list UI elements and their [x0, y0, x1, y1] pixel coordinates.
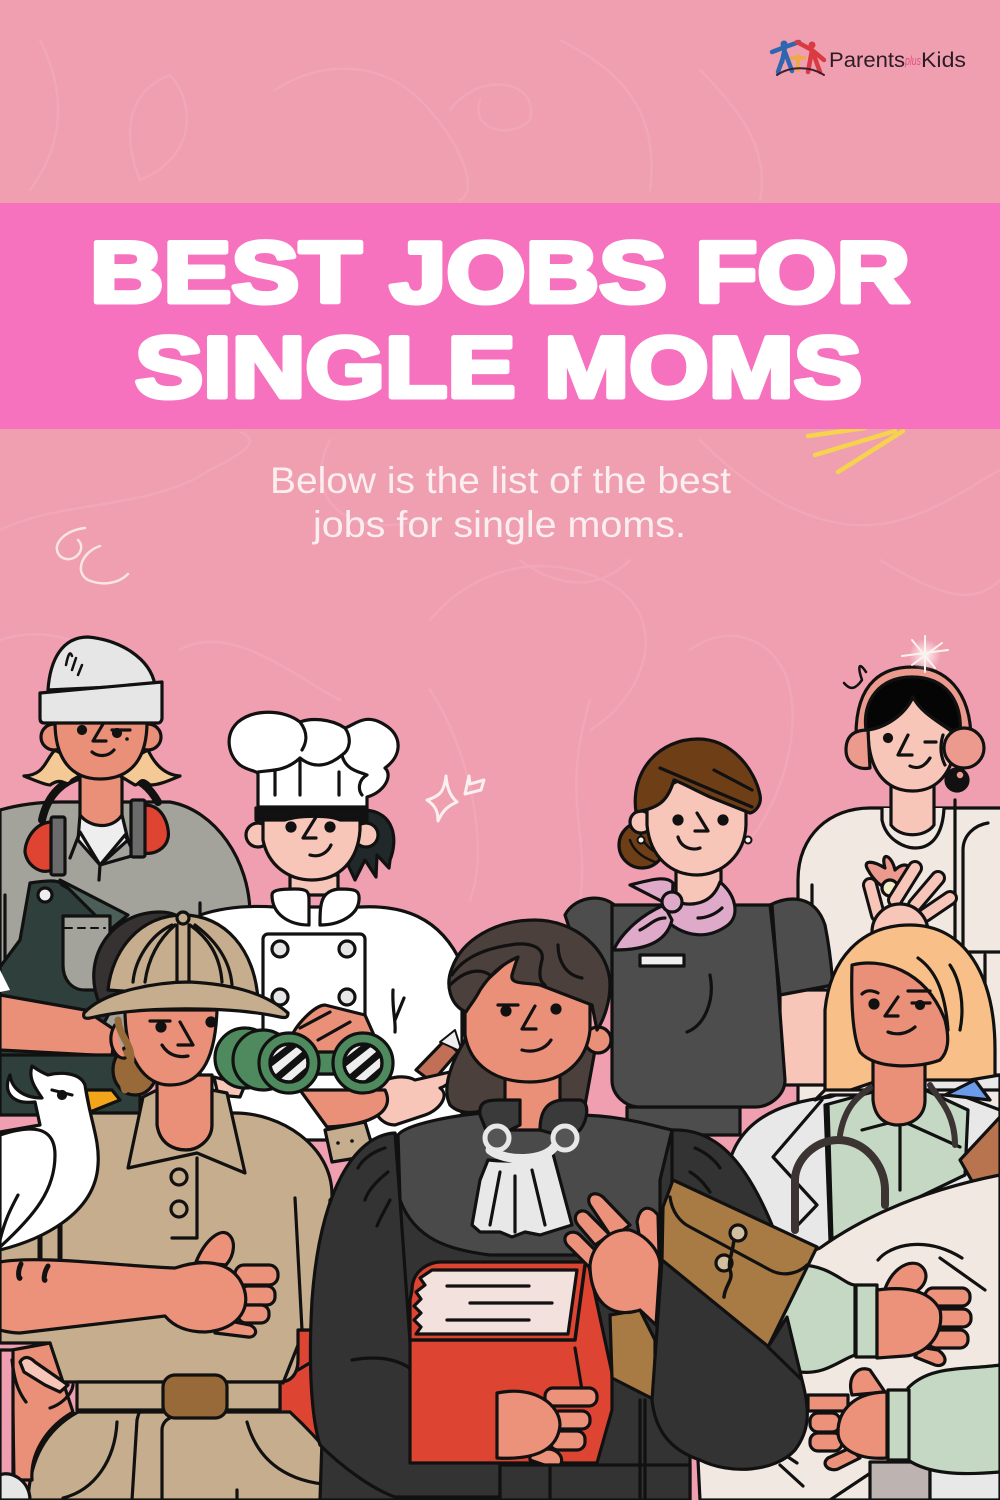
face — [465, 950, 590, 1082]
headphone band — [42, 776, 158, 820]
jabot — [472, 1150, 572, 1237]
scarf — [614, 879, 735, 950]
bun — [619, 822, 665, 868]
buttons and placket — [171, 1169, 187, 1185]
dress — [612, 905, 785, 1107]
ears — [41, 724, 67, 750]
torso — [798, 808, 1000, 1200]
apron — [0, 881, 130, 1060]
person: headset woman — [798, 666, 1000, 1200]
hair bun — [113, 1045, 157, 1095]
face — [55, 722, 147, 779]
person: chef — [200, 712, 462, 1140]
logo: Kids — [921, 49, 966, 72]
subtitle — [270, 460, 732, 545]
decoration: white curl — [57, 528, 128, 583]
skirt — [28, 1412, 360, 1500]
earphones — [846, 730, 870, 768]
right sleeve lower — [652, 1260, 807, 1469]
hat dome — [108, 915, 258, 1000]
ear — [585, 1027, 611, 1053]
hair — [865, 677, 960, 735]
background arm top left — [0, 995, 115, 1056]
ear and face — [630, 811, 652, 833]
left sleeve — [310, 1133, 500, 1497]
face details — [884, 734, 936, 768]
person: builder — [0, 637, 250, 1060]
logo icon: family figures — [772, 40, 824, 75]
collar — [128, 1090, 245, 1173]
coat lapel — [773, 1100, 822, 1228]
hair — [635, 739, 760, 813]
headset band — [856, 667, 971, 740]
book — [410, 1262, 612, 1463]
red robe lining behind explorer — [280, 1330, 420, 1500]
forearm and hand — [0, 1232, 278, 1337]
face details — [674, 813, 727, 849]
hat headband — [94, 912, 189, 1010]
collar — [290, 875, 338, 895]
grey shoe / pant at bottom — [870, 1462, 930, 1500]
beanie — [48, 637, 155, 690]
scrub top — [825, 1090, 968, 1240]
name badge — [640, 955, 684, 966]
title — [90, 225, 910, 416]
stethoscope — [840, 1085, 955, 1145]
cuff — [325, 1122, 375, 1162]
person: judge — [310, 920, 817, 1500]
seagull — [0, 1066, 120, 1258]
yoke — [398, 1112, 672, 1255]
face — [852, 963, 948, 1066]
lower robe — [500, 1465, 690, 1500]
ear muffs — [25, 822, 52, 871]
robe base — [320, 1135, 690, 1500]
hair back — [825, 925, 1000, 1100]
lab coat — [730, 1075, 1000, 1300]
hair strands — [918, 958, 962, 1030]
ears — [246, 823, 270, 847]
person: doctor — [690, 925, 1000, 1500]
binoculars — [215, 1005, 394, 1093]
torso — [0, 802, 250, 1060]
shirt — [0, 1113, 332, 1382]
neck — [157, 1075, 212, 1150]
front hair — [449, 920, 610, 1030]
face — [111, 1025, 125, 1058]
hair — [24, 750, 180, 785]
title banner — [0, 203, 1000, 429]
chef hat — [229, 712, 398, 807]
body — [200, 906, 462, 1140]
back hair — [447, 1020, 595, 1112]
subtitle: Below is the list of the best — [270, 460, 732, 501]
logo wordmark: Parents — [829, 49, 905, 72]
chef hand with brush — [214, 1030, 462, 1125]
shirt and collar — [78, 815, 128, 865]
cream body — [690, 1175, 1000, 1500]
envelope lower — [610, 1310, 655, 1400]
lower left hand — [12, 1343, 73, 1480]
belt — [77, 1382, 280, 1410]
person: explorer — [0, 912, 394, 1500]
person: flight attendant — [565, 739, 833, 1135]
bottom hand on book — [497, 1388, 597, 1468]
title: SINGLE MOMS — [135, 320, 862, 416]
subtitle: jobs for single moms. — [312, 504, 686, 545]
hair — [348, 810, 394, 880]
brown bag at edge — [960, 1117, 1000, 1207]
right sleeve upper — [660, 1130, 772, 1400]
green arm lower — [908, 1365, 1000, 1474]
judge raised hand — [565, 1194, 660, 1325]
decoration: star sparkle on headset — [902, 636, 948, 672]
neck — [505, 1075, 560, 1130]
arm under binoculars — [300, 1090, 388, 1127]
neck — [873, 1060, 925, 1125]
hat brim — [84, 982, 288, 1018]
skirt — [627, 1107, 740, 1135]
sleeves — [565, 898, 622, 1000]
collar — [480, 1100, 587, 1140]
logo: plus — [904, 53, 921, 68]
title: BEST JOBS FOR — [90, 225, 910, 321]
neck — [80, 770, 122, 826]
green arm upper — [770, 1265, 855, 1372]
panel and buttons — [263, 934, 365, 1074]
face — [868, 697, 956, 791]
logo — [772, 40, 966, 75]
envelope — [662, 1180, 817, 1347]
hands and flower — [866, 856, 910, 890]
neck — [676, 870, 721, 910]
right arm — [780, 990, 830, 1085]
decoration: yellow scribble — [808, 428, 903, 472]
face — [263, 815, 360, 880]
decoration: sparkles — [427, 776, 484, 821]
